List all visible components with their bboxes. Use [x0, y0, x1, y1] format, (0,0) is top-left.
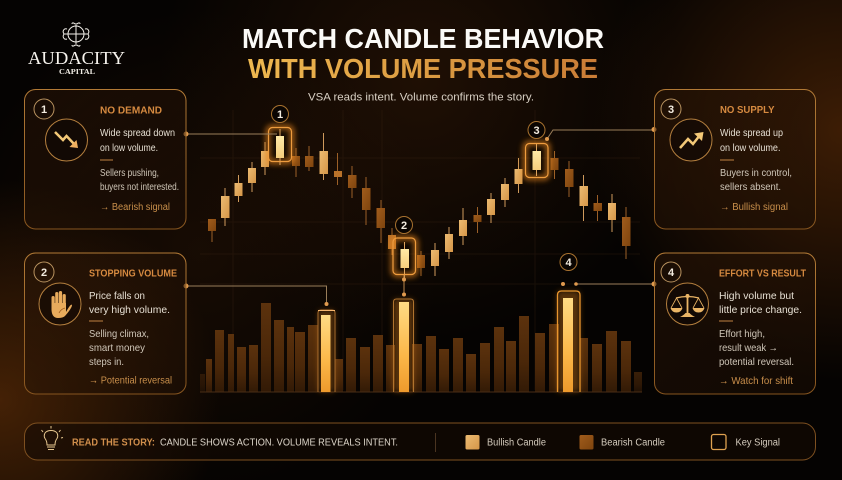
key volume bar center	[393, 299, 414, 392]
detail: Effort high,	[719, 328, 765, 340]
chart marker 1: 1	[277, 109, 283, 121]
icon: light bulb	[42, 426, 63, 450]
bullish and bearish candles: right swing	[431, 151, 630, 276]
signal: → Bullish signal	[720, 202, 788, 213]
chart marker 1	[272, 106, 288, 122]
badge 3	[661, 99, 681, 119]
heading: STOPPING VOLUME	[89, 268, 177, 280]
volume bars chart	[200, 291, 642, 392]
key volume bar 2	[318, 310, 335, 392]
badge 2: 2	[41, 267, 47, 279]
description: Wide spread down	[100, 128, 175, 139]
connector: effort vs result to bar	[561, 282, 656, 286]
detail: buyers not interested.	[100, 182, 179, 193]
chart marker 3	[528, 122, 545, 138]
description: Price falls on	[89, 290, 145, 302]
detail: steps in.	[89, 356, 124, 368]
connector: stopping volume to bar	[184, 284, 328, 306]
legend: key signal	[712, 434, 780, 450]
detail: Sellers pushing,	[100, 168, 159, 179]
badge 1: 1	[41, 104, 47, 116]
heading: EFFORT VS RESULT	[719, 268, 806, 280]
chart marker 2	[396, 216, 412, 234]
title line 1: MATCH CANDLE BEHAVIOR	[242, 23, 604, 54]
signal: → Bearish signal	[100, 202, 170, 213]
description: little price change.	[719, 304, 802, 316]
logo: Audacity Capital	[28, 23, 125, 76]
chart marker 3: 3	[533, 125, 540, 137]
legend: bearish candle: Bearish Candle	[601, 438, 665, 448]
description	[720, 128, 783, 154]
logo subtitle: CAPITAL	[59, 68, 95, 76]
description	[89, 290, 170, 316]
icon: rising arrow	[670, 119, 712, 161]
description	[100, 128, 175, 154]
description: on low volume.	[720, 143, 780, 154]
legend: key signal: Key Signal	[736, 438, 780, 448]
legend: bullish candle: Bullish Candle	[487, 438, 546, 448]
panel: stopping volume	[24, 253, 186, 394]
icon: falling arrow	[46, 119, 88, 161]
logo wordmark: AUDACITY	[28, 48, 125, 68]
legend: bearish candle	[580, 435, 665, 450]
detail: result weak →	[719, 342, 778, 354]
key candle 1	[268, 127, 292, 165]
candlestick chart	[208, 127, 630, 278]
description: High volume but	[719, 290, 794, 302]
description: Wide spread up	[720, 128, 783, 139]
detail	[89, 328, 149, 368]
legend: bullish candle	[466, 435, 546, 450]
key volume bar 4	[557, 291, 580, 392]
detail: smart money	[89, 342, 146, 354]
connector: no supply to candle 3	[545, 127, 656, 141]
detail: Selling climax,	[89, 328, 149, 340]
icon: balance scale	[666, 283, 708, 325]
badge 3: 3	[668, 104, 674, 116]
chart marker 2: 2	[401, 220, 407, 232]
key candle 2	[393, 238, 416, 278]
description: on low volume.	[100, 143, 158, 154]
chart marker 4: 4	[565, 257, 572, 269]
chart marker 4	[560, 254, 577, 270]
detail: sellers absent.	[720, 182, 781, 193]
panel: no supply	[654, 90, 816, 229]
logo ornament	[63, 23, 89, 46]
panel: effort vs result	[654, 253, 816, 394]
signal: → Watch for shift	[719, 375, 793, 387]
detail	[720, 168, 792, 193]
description: very high volume.	[89, 304, 170, 316]
connector: candle 2 to volume bar	[402, 275, 406, 296]
badge 4	[661, 262, 681, 282]
badge 1	[34, 99, 54, 119]
heading: NO DEMAND	[100, 106, 162, 116]
subtitle: VSA reads intent. Volume confirms the story.	[308, 92, 534, 104]
detail	[719, 328, 794, 368]
footer message: CANDLE SHOWS ACTION. VOLUME REVEALS INTENT.	[160, 436, 398, 448]
heading: NO SUPPLY	[720, 105, 775, 116]
badge 2	[34, 262, 54, 282]
icon: raised hand	[39, 283, 81, 325]
detail: Buyers in control,	[720, 168, 792, 179]
panel: no demand	[24, 90, 186, 229]
badge 4: 4	[668, 267, 675, 279]
key candle 3	[525, 143, 548, 178]
footer bar	[24, 423, 816, 460]
footer label: READ THE STORY:	[72, 436, 155, 448]
description	[719, 290, 802, 316]
bullish and bearish candles: left swing	[208, 133, 425, 276]
title	[242, 23, 604, 104]
signal: → Potential reversal	[89, 374, 172, 386]
connector: no demand to candle 1	[184, 132, 277, 136]
detail: potential reversal.	[719, 356, 794, 368]
title line 2: WITH VOLUME PRESSURE	[248, 53, 598, 84]
detail	[100, 168, 179, 193]
